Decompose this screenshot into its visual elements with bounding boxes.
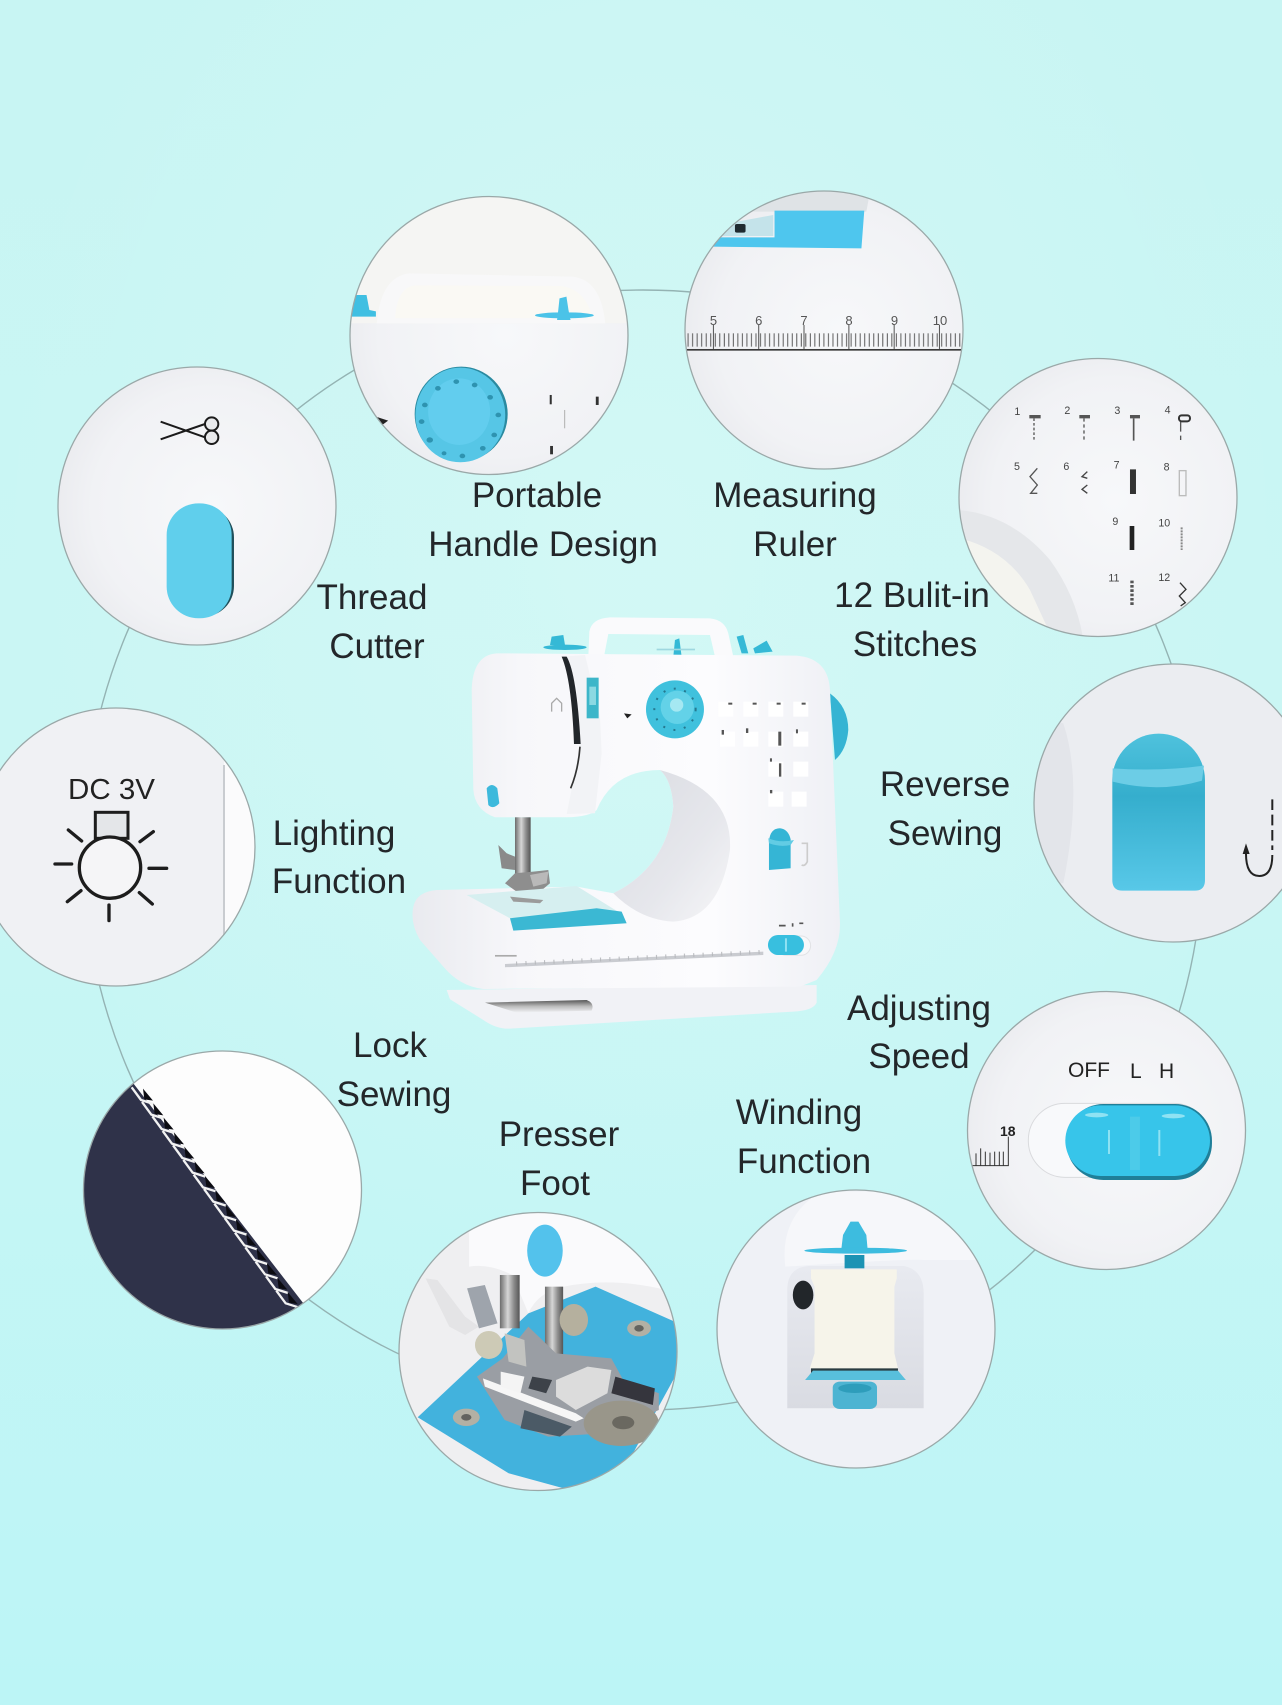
panel: measuring ruler	[680, 186, 970, 476]
label: thread cutter: Thread	[317, 578, 427, 617]
label: lighting function	[272, 814, 406, 901]
label: reverse sewing	[880, 765, 1010, 853]
label: measuring ruler: Measuring	[713, 476, 877, 515]
recess	[787, 1266, 924, 1408]
ruler numbers: 8	[845, 313, 853, 328]
label: lock sewing	[337, 1026, 451, 1114]
ruler numbers: 9	[891, 313, 898, 328]
stitch numbers: 12	[1158, 572, 1170, 584]
label: presser foot	[499, 1115, 620, 1203]
machine arm highlight	[804, 1237, 901, 1252]
stitch marks	[550, 395, 599, 454]
cutter button	[167, 503, 234, 618]
thread spool	[810, 1269, 898, 1373]
stitch numbers	[1014, 404, 1171, 585]
stitch dial	[646, 680, 704, 738]
stitch numbers: 10	[1158, 517, 1170, 529]
ruler numbers: 6	[755, 313, 762, 328]
label: measuring ruler	[713, 476, 877, 564]
label: portable handle design	[428, 476, 658, 564]
stitch numbers: 7	[1114, 459, 1120, 471]
dark fabric	[63, 1083, 303, 1360]
scissors icon	[161, 417, 218, 444]
needle plate	[418, 1287, 681, 1492]
label: portable handle design: Handle Design	[428, 525, 658, 564]
bottom plate	[447, 985, 817, 1029]
label: thread cutter	[317, 578, 427, 666]
presser bracket	[426, 1278, 479, 1335]
pointer	[377, 417, 388, 424]
label: 12 bulit-in stitches	[834, 576, 990, 664]
panel: 12 built-in stitches	[955, 355, 1245, 645]
label: presser foot: Foot	[520, 1164, 590, 1203]
right spool pin	[535, 297, 594, 320]
plate screws	[453, 1320, 651, 1426]
label: lighting function: Lighting	[273, 814, 395, 853]
speed labels: OFF	[1068, 1059, 1110, 1082]
left spool pin	[352, 295, 376, 317]
light bulb icon	[55, 812, 167, 921]
machine body	[412, 653, 840, 989]
stitch numbers: 6	[1063, 461, 1069, 473]
label: winding function: Winding	[736, 1093, 862, 1132]
top spool pins	[543, 635, 773, 657]
label: reverse sewing: Reverse	[880, 765, 1010, 804]
label: presser foot: Presser	[499, 1115, 620, 1154]
stitch symbols	[1029, 415, 1190, 606]
needle bar	[515, 817, 531, 884]
panel: adjusting speed	[960, 985, 1260, 1275]
label: adjusting speed: Speed	[868, 1037, 970, 1076]
base ruler	[495, 946, 763, 967]
label: adjusting speed: Adjusting	[847, 989, 991, 1028]
thread take-up channel	[562, 655, 602, 814]
stitch numbers: 5	[1014, 461, 1020, 473]
panel: thread cutter	[55, 365, 340, 650]
stitch dial	[415, 367, 508, 462]
carry handle	[588, 617, 733, 657]
stitch chart	[718, 702, 808, 807]
reverse lever	[1112, 734, 1205, 891]
speed switch	[768, 923, 811, 955]
blue button	[527, 1225, 563, 1277]
speed scale mark	[970, 1137, 1008, 1166]
reverse symbol	[1243, 799, 1272, 876]
panel: portable handle	[349, 196, 629, 476]
ruler numbers: 5	[710, 313, 717, 328]
panel: lighting function	[0, 705, 264, 990]
speed labels: L	[1130, 1060, 1142, 1083]
speed slot	[1028, 1103, 1210, 1177]
stitch numbers: 9	[1112, 516, 1118, 528]
blue spindle	[804, 1222, 907, 1409]
label: adjusting speed	[847, 989, 991, 1076]
label: winding function	[736, 1093, 871, 1181]
label: portable handle design: Portable	[472, 476, 602, 515]
pointer	[624, 713, 632, 718]
hole	[793, 1281, 813, 1309]
light switch	[487, 785, 499, 807]
stitch numbers: 4	[1165, 404, 1171, 416]
handle	[377, 273, 605, 323]
arm inner crescent	[613, 770, 730, 922]
speed labels	[1069, 1062, 1172, 1078]
label DC 3V: DC 3V	[68, 774, 156, 806]
upper panel tint	[352, 223, 410, 323]
stitch numbers: 2	[1064, 405, 1070, 417]
stitch numbers: 1	[1014, 406, 1020, 418]
ruler numbers	[710, 316, 947, 325]
stitch numbers: 11	[1108, 573, 1119, 585]
ruler scale	[686, 325, 963, 351]
ruler numbers: 7	[800, 313, 808, 328]
needle plate	[467, 886, 627, 931]
scale number: 18	[1000, 1123, 1016, 1139]
machine arch shading	[967, 512, 1082, 634]
sewing machine	[412, 617, 848, 1029]
panel: winding function	[710, 1185, 1000, 1475]
panel: lock sewing	[63, 1048, 365, 1360]
bobbin plate	[584, 1401, 659, 1446]
speed slider	[1065, 1104, 1212, 1180]
label: lighting function: Function	[272, 862, 406, 901]
panel: presser foot	[395, 1205, 685, 1495]
stitch numbers: 3	[1114, 405, 1120, 417]
ruler numbers: 10	[933, 313, 947, 328]
label: lock sewing: Sewing	[337, 1075, 451, 1114]
body contour	[1064, 734, 1073, 880]
tension mark	[552, 698, 562, 712]
presser foot	[498, 845, 550, 892]
lock stitches	[132, 1087, 298, 1307]
label: lock sewing: Lock	[353, 1026, 427, 1065]
stitch numbers: 8	[1164, 462, 1170, 474]
label: measuring ruler: Ruler	[753, 525, 837, 564]
label: thread cutter: Cutter	[329, 627, 425, 666]
reverse lever	[768, 828, 807, 870]
label: 12 bulit-in stitches: Stitches	[853, 625, 977, 664]
label: winding function: Function	[737, 1142, 871, 1181]
panel: reverse sewing	[1030, 660, 1282, 950]
hand wheel	[830, 693, 848, 760]
label: 12 bulit-in stitches: 12 Bulit-in	[834, 576, 990, 615]
blue ruler housing	[707, 190, 870, 248]
speed labels: H	[1159, 1060, 1174, 1083]
connecting ring	[83, 290, 1203, 1410]
machine head	[469, 1210, 667, 1313]
metal foot	[467, 1275, 659, 1437]
label: reverse sewing: Sewing	[888, 814, 1002, 853]
